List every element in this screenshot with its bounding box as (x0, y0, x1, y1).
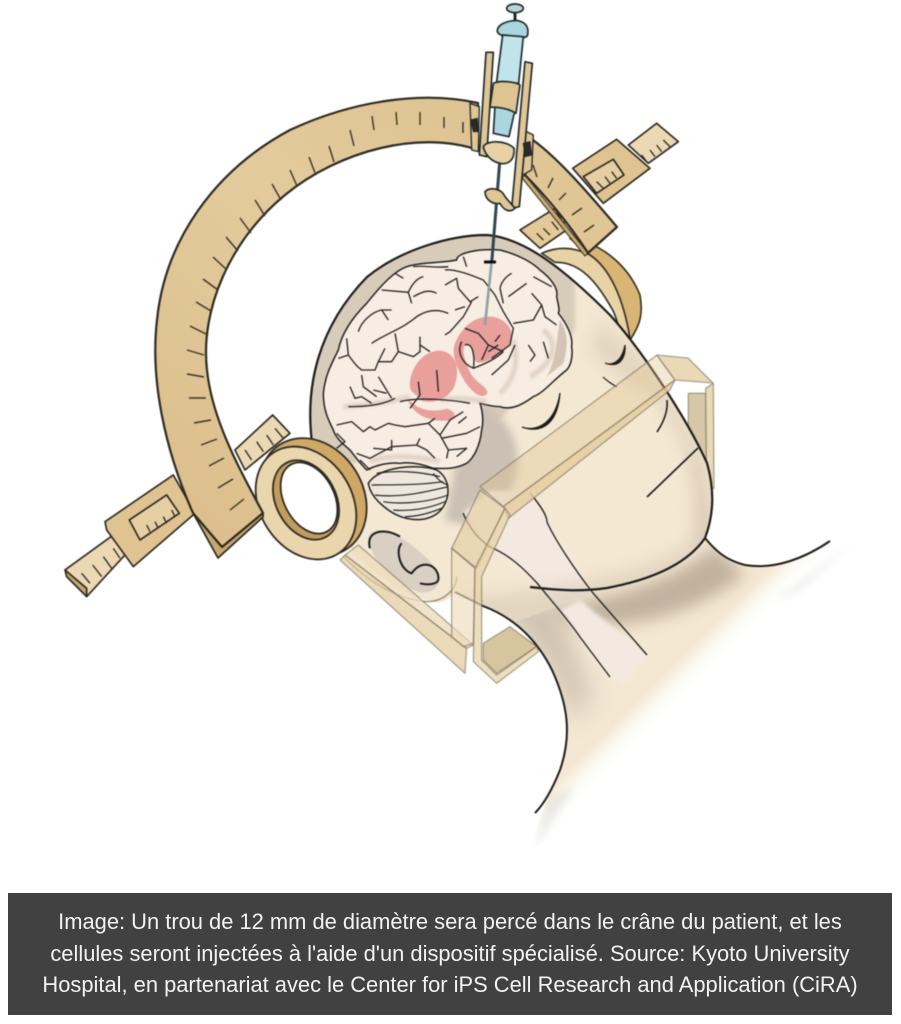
barrel cap (497, 21, 528, 38)
syringe and holder (470, 4, 533, 325)
needle clamp (485, 189, 515, 211)
caption: Hospital, en partenariat avec le Center for iPS Cell Research and Application (CiRA) (42, 972, 858, 997)
knobs (471, 118, 532, 157)
head (299, 225, 830, 813)
lower barrel (493, 107, 515, 137)
eye lashes (522, 345, 625, 429)
needle (492, 150, 501, 263)
right ear ring (542, 238, 641, 340)
sulci upper left (338, 266, 448, 370)
arc tick marks (187, 112, 594, 510)
holder rail right (512, 62, 532, 208)
holder clamp (490, 82, 520, 113)
brain stem shadow (445, 405, 518, 523)
sulci upper right (445, 257, 557, 375)
holder hub (483, 142, 514, 164)
ear (343, 530, 457, 602)
cerebrum (323, 250, 572, 470)
translucent side arm (340, 545, 473, 673)
throat strip over neck (560, 600, 647, 682)
arc: right section (522, 175, 588, 256)
head shading (311, 236, 711, 622)
right slider ruler (520, 123, 678, 248)
hippocampus and striatum (407, 317, 512, 421)
arc: left section (155, 98, 478, 547)
neck (514, 540, 815, 838)
needle stop mark (484, 260, 496, 264)
throat strip (462, 489, 588, 600)
caption (8, 893, 892, 1015)
sulci lower (337, 370, 480, 470)
skull interior band (311, 236, 576, 464)
translucent head frame: left corner (452, 490, 538, 683)
frame: back right strip (688, 383, 714, 488)
frame: back bottom plate (483, 627, 537, 673)
neck outlines (455, 538, 830, 813)
brain shading (343, 330, 553, 462)
neck shading (515, 543, 815, 836)
arc: lower end (193, 513, 263, 558)
plunger head (507, 4, 523, 13)
caption: cellules seront injectées à l'aide d'un dispositif spécialisé. Source: Kyoto University (50, 940, 850, 966)
holder rail left (479, 52, 493, 157)
needle inside brain (485, 262, 492, 325)
cerebellum (368, 467, 448, 520)
translucent head frame: front band (480, 355, 713, 518)
brain (323, 250, 572, 520)
plunger (510, 13, 519, 21)
left slider ruler (65, 415, 290, 597)
left ear ring (235, 418, 388, 578)
barrel (497, 35, 523, 83)
graduated arc (155, 98, 617, 558)
throat lines (463, 493, 647, 677)
arc end blocks (470, 103, 533, 177)
illustration: stereotactic surgery on a patient's head (63, 2, 832, 838)
face outline (310, 235, 712, 590)
mouth and nose lines (647, 400, 698, 497)
caption: Image: Un trou de 12 mm de diamètre sera percé dans le crâne du patient, et les (58, 909, 842, 934)
